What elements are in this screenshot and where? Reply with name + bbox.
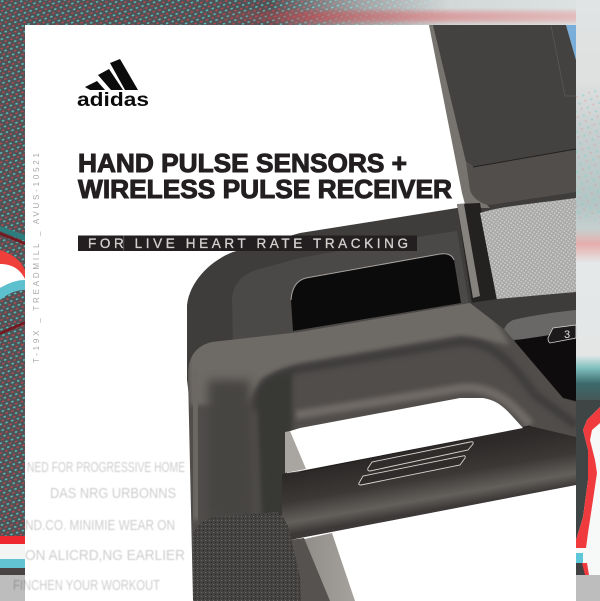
icon: three bars [85,59,138,90]
left arm tone [208,380,254,520]
treadmill product photo [180,25,580,601]
right console panel [470,292,576,405]
console hole [291,254,461,331]
foam grip [193,512,301,601]
adidas logo [77,59,149,111]
ghost background text: ON ALICRD,NG EARLIER [25,547,185,564]
ghost background text: NED FOR PROGRESSIVE HOME [27,459,185,476]
wordmark: adidas [77,90,149,111]
ghost background text: DAS NRG URBONNS [50,485,176,502]
subtitle banner: FOR LIVE HEART RATE TRACKING [88,236,408,251]
label: 3 [548,325,576,343]
display lower bezel [466,149,576,205]
hand pulse sensor lower [359,456,465,485]
upright pillar [457,203,497,304]
top band [188,295,510,405]
tube shading near window [296,388,530,425]
title [78,148,452,204]
base tone [188,324,576,600]
mesh speaker grille [480,198,576,300]
inner tube shadow [256,342,576,425]
console base [187,190,576,420]
inner arm shadow [257,372,292,520]
hand pulse sensor upper [368,442,473,471]
display screen [433,25,576,167]
ghost background text: FINCHEN YOUR WORKOUT [13,577,160,594]
blue corner of screen [566,25,576,60]
white window [287,398,523,473]
title: WIRELESS PULSE RECEIVER [78,174,452,204]
strut behind window [285,431,306,473]
ghost background text [13,459,185,594]
console inner panel [232,231,470,345]
label: 3: 3 [564,329,570,341]
black screen patch [511,331,576,401]
screen edge highlight [429,25,490,208]
handlebar frame [180,295,580,601]
ghost background text: ND.CO. MINIMIE WEAR ON [25,517,175,534]
vertical product code: T-19X _ TREADMILL _ AVUS-10521 [32,152,41,363]
strut bottom right [300,533,355,601]
left arm highlight [194,370,197,520]
fabric patch [504,310,576,340]
lower crossbar [282,426,576,542]
title: HAND PULSE SENSORS + [78,148,407,178]
